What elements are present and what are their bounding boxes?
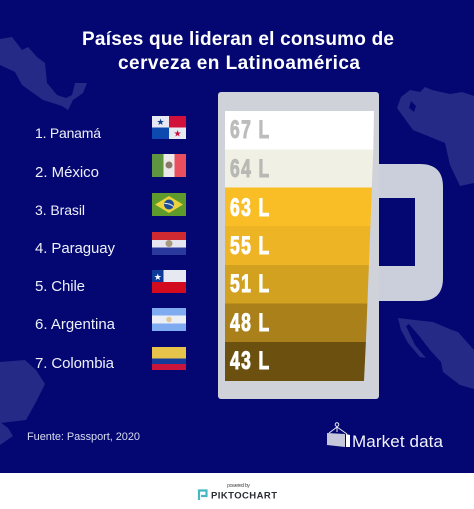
title: cerveza en Latinoamérica [118, 53, 360, 74]
beer level bands [225, 111, 374, 381]
country ranking list: 2. México [35, 164, 99, 181]
volume labels: 48 L [230, 308, 271, 337]
volume labels: 55 L [230, 231, 271, 260]
icon: flag of Mexico [152, 154, 186, 177]
icon: flag of Chile: ★ [154, 272, 162, 282]
volume labels [230, 115, 271, 375]
volume labels: 63 L [230, 193, 271, 222]
mug handle [379, 164, 443, 301]
volume labels: 51 L [230, 269, 271, 298]
country ranking list: 6. Argentina [35, 316, 116, 333]
volume labels: 64 L [230, 154, 271, 183]
country ranking list: 4. Paraguay [35, 240, 116, 257]
country ranking list [35, 125, 116, 372]
icon: hanging container [327, 423, 350, 447]
country ranking list: 7. Colombia [35, 355, 115, 372]
title: Países que lideran el consumo de [82, 29, 394, 50]
icon: flag of Panama [152, 116, 186, 139]
icon: flag of Panama: ★ [156, 117, 165, 127]
logo: Market data: Market data [352, 432, 444, 451]
icon: Piktochart P [199, 490, 206, 500]
title [82, 29, 394, 74]
footer: powered by Piktochart: powered by [227, 483, 250, 489]
volume labels: 43 L [230, 346, 271, 375]
source note: Fuente: Passport, 2020 [27, 431, 140, 443]
country ranking list: 3. Brasil [35, 202, 85, 218]
icon: flag of Colombia [152, 347, 186, 370]
mug body [218, 92, 379, 399]
icon: flag of Brazil [152, 193, 186, 216]
beer mug [218, 92, 443, 399]
logo: Market data [327, 423, 444, 451]
icon: flag of Argentina [152, 308, 186, 331]
country ranking list: 5. Chile [35, 278, 85, 295]
icon: flag of Panama: ★ [173, 128, 182, 138]
volume labels: 67 L [230, 115, 271, 144]
footer: powered by Piktochart: PIKTOCHART [211, 490, 277, 502]
footer: powered by Piktochart [199, 483, 277, 502]
country ranking list: 1. Panamá [35, 125, 101, 141]
icon: flag of Paraguay [152, 232, 186, 255]
icon: flag of Chile [152, 270, 186, 293]
